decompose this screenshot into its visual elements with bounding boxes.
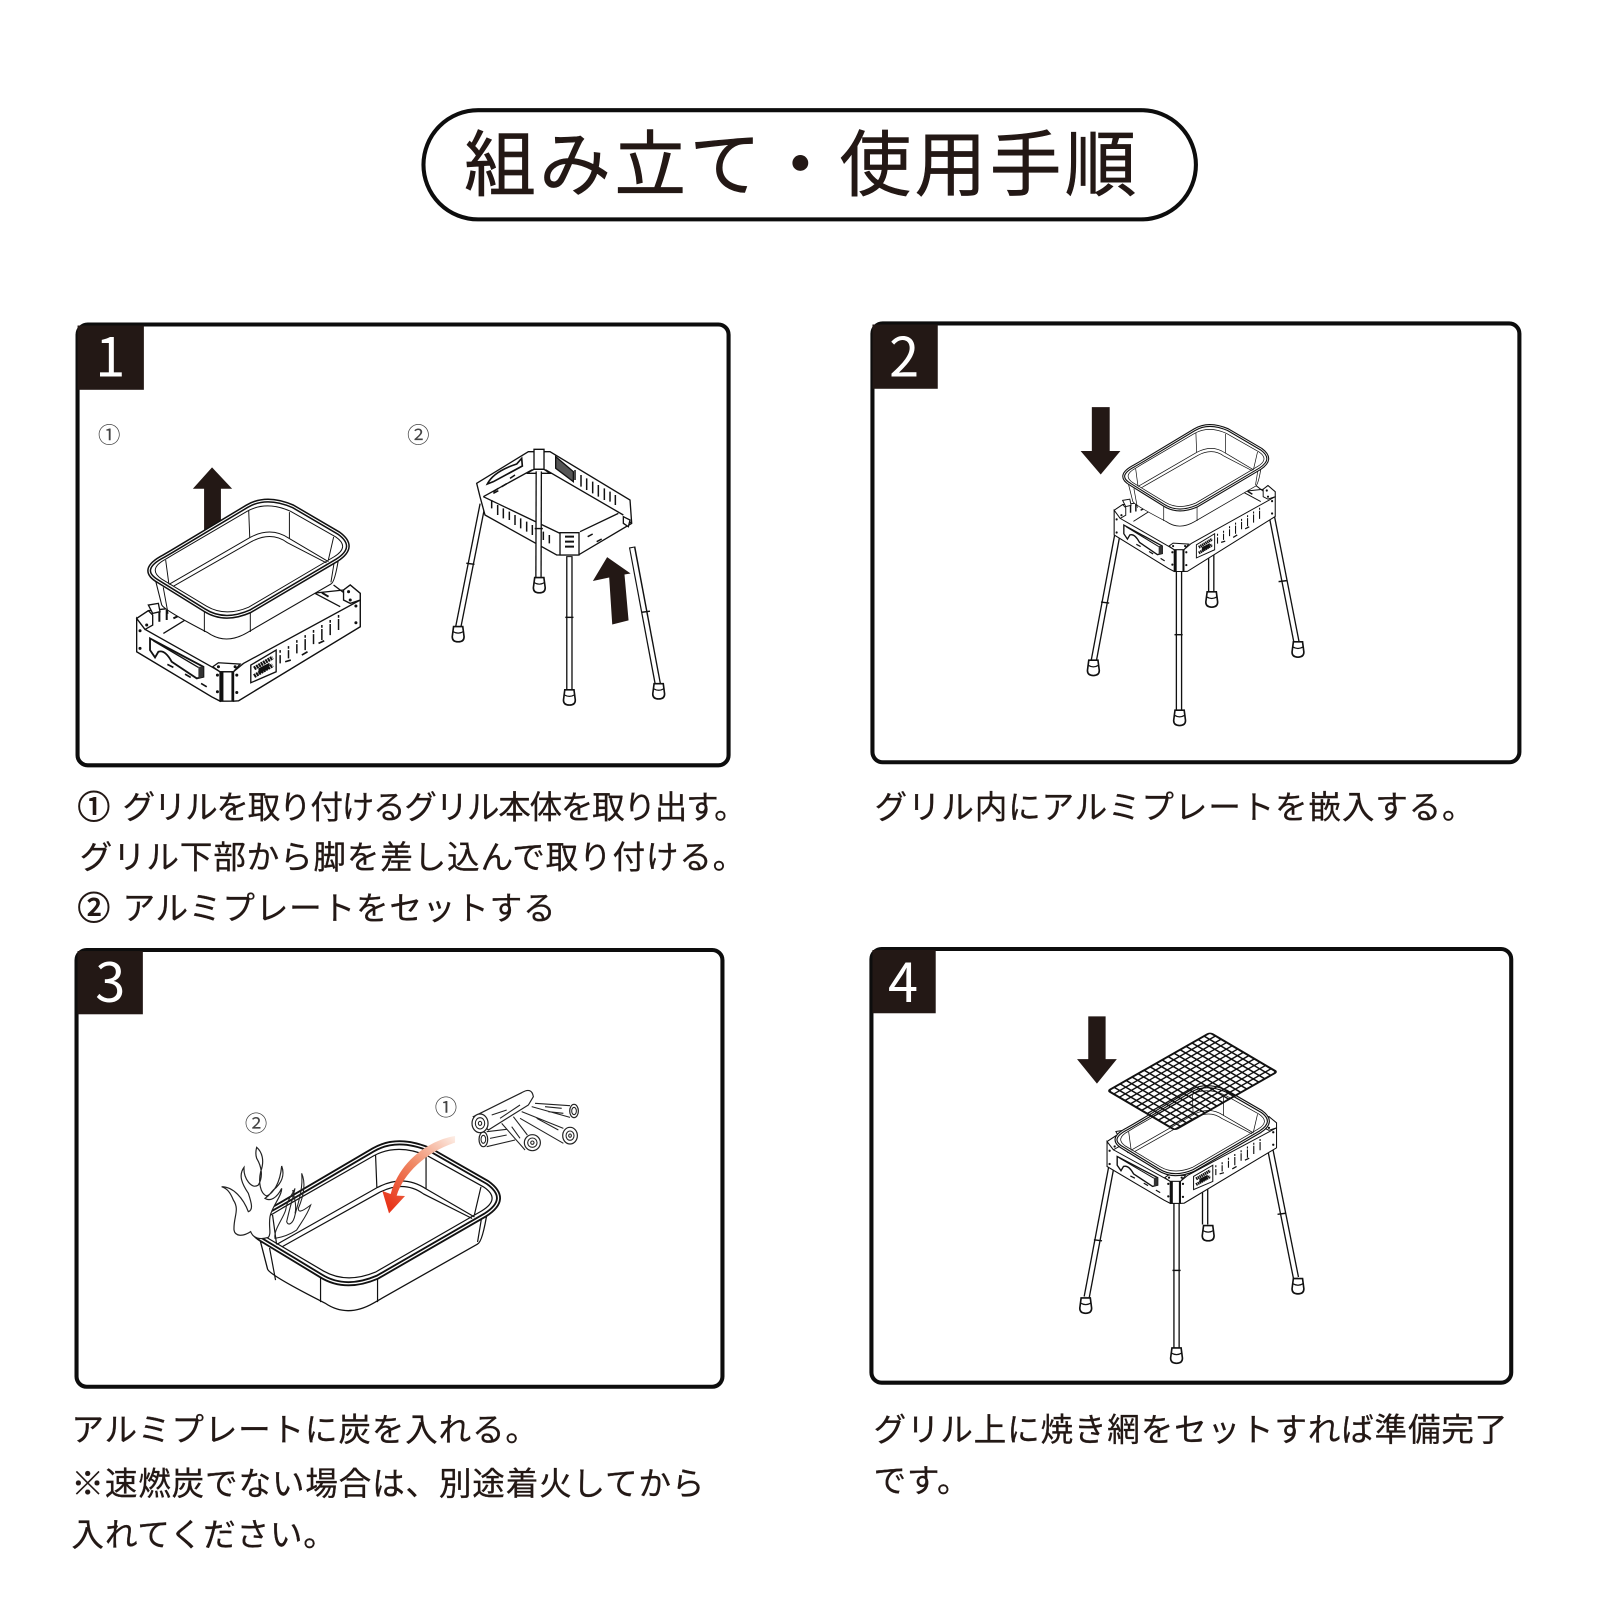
grill net [1108,1033,1277,1130]
caption: step 1: グリル下部から脚を差し込んで取り付ける。 [80,838,746,875]
panel: step 4 [871,939,1511,1383]
step number 3 [78,939,143,1018]
circled label 1: ① [98,423,120,448]
illustration: charcoal logs [472,1090,578,1151]
circled label 2: ② [245,1112,267,1137]
caption: step 3 [71,1411,705,1553]
caption: step 4 [873,1411,1508,1499]
arrow: curved red [382,1136,455,1213]
illustration: attaching legs to grill [452,449,665,705]
illustration: plate into grill [1081,407,1304,726]
arrow down [1077,1016,1117,1084]
step number 4: 4 [888,939,918,1018]
illustration: flames [222,1147,311,1239]
caption: step 3: ※速燃炭でない場合は、別途着火してから [71,1465,705,1502]
caption: step 1: グリルを取り付けるグリル本体を取り出す。 [122,788,745,825]
step number 1: 1 [95,314,125,393]
caption: step 1 [78,788,746,926]
step number 1 [78,314,144,393]
caption: step 1: アルミプレートをセットする [122,889,556,926]
illustration: tray [252,1143,499,1311]
caption: step 3: アルミプレートに炭を入れる。 [71,1411,539,1448]
circled label 2: ② [407,423,430,448]
caption: step 1: ② [78,889,111,926]
illustration: grill body with plate lifted out [137,467,360,701]
step number 2: 2 [889,314,919,393]
arrow up [193,467,232,535]
panel: step 1 [78,314,729,765]
caption: step 3: 入れてください。 [71,1516,337,1553]
caption: step 2: グリル内にアルミプレートを嵌入する。 [874,788,1475,825]
step number 2 [872,314,938,393]
arrow up diagonal [593,557,631,624]
circled label 1: ① [435,1095,457,1120]
arrow down [1081,407,1120,474]
title [423,110,1196,219]
panel: step 3 [77,939,722,1387]
title: 組み立て・使用手順 [464,126,1140,206]
step number 4 [872,939,936,1018]
caption: step 4: です。 [873,1462,970,1499]
panel: step 2 [872,314,1519,762]
illustration: grill with net [1077,1016,1304,1363]
step number 3: 3 [95,939,125,1018]
caption: step 4: グリル上に焼き網をセットすれば準備完了 [873,1411,1508,1448]
caption: step 1: ① [78,788,111,825]
